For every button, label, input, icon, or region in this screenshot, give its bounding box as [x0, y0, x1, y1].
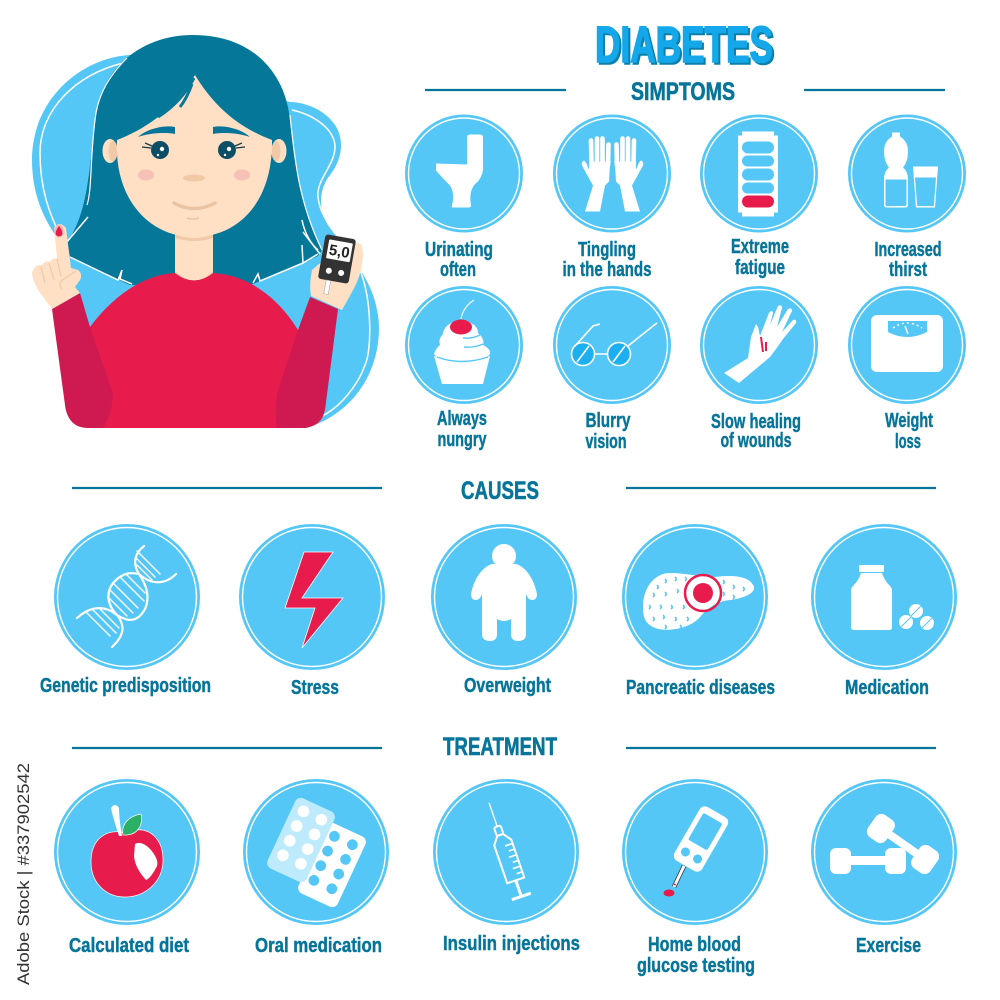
icon: pill bottle	[851, 565, 934, 630]
symptom: slow healing of wounds	[700, 286, 818, 452]
icon: gloves	[582, 138, 643, 212]
label: Extreme	[731, 236, 789, 258]
title	[595, 16, 775, 75]
symptom: extreme fatigue	[700, 114, 818, 279]
right hand	[310, 243, 363, 310]
icon: wounded hand	[724, 305, 796, 383]
left sleeve	[52, 293, 113, 428]
label: nungry	[438, 429, 487, 451]
cause: medication	[811, 524, 957, 699]
cause: genetic predisposition	[40, 524, 211, 697]
symptom: weight loss	[848, 286, 966, 453]
symptom: urinating often	[405, 114, 523, 281]
label: Overweight	[464, 675, 551, 697]
label: fatigue	[735, 257, 785, 279]
right sleeve	[276, 297, 338, 428]
label	[637, 934, 755, 977]
label: Exercise	[856, 935, 921, 957]
label: Slow healing	[711, 411, 801, 433]
label: often	[440, 259, 476, 281]
treatment: insulin injections	[433, 779, 580, 955]
symptom: increased thirst	[848, 114, 966, 281]
label: Pancreatic diseases	[626, 677, 775, 699]
symptom: blurry vision	[553, 286, 671, 453]
label: Insulin injections	[443, 933, 580, 955]
illustration: woman with glucose meter	[32, 35, 379, 428]
label: Tingling	[578, 239, 636, 261]
left hand	[32, 224, 81, 309]
label: Home blood	[648, 934, 741, 956]
icon: pancreas	[643, 573, 754, 630]
label	[586, 410, 631, 453]
label	[711, 411, 801, 452]
treatment: home blood glucose testing	[622, 779, 768, 977]
heading: treatment: TREATMENT	[443, 733, 557, 761]
eyes	[151, 141, 169, 159]
label: Increased	[874, 239, 942, 261]
glucose meter: 5,0	[328, 242, 351, 262]
label: Oral medication	[255, 935, 382, 957]
label	[425, 239, 493, 281]
cheeks, nose, mouth	[138, 170, 154, 180]
label: in the hands	[562, 259, 652, 281]
title: DIABETES	[597, 18, 775, 75]
label	[874, 239, 942, 281]
label	[885, 410, 933, 453]
treatment: calculated diet	[54, 779, 200, 957]
glucose meter	[315, 234, 356, 298]
stock id vertical text: Adobe Stock | #337902542	[14, 763, 33, 985]
label: of wounds	[720, 430, 792, 452]
icon: glucometer	[664, 804, 730, 896]
label: glucose testing	[637, 955, 755, 977]
symptom: tingling in the hands	[553, 114, 671, 281]
label: Always	[437, 408, 487, 430]
icon: bathroom scale	[871, 315, 943, 372]
label: Stress	[291, 677, 339, 699]
treatment: oral medication	[243, 779, 389, 957]
icon: overweight figure	[471, 544, 537, 641]
icon: syringe	[480, 800, 531, 900]
label: Blurry	[586, 410, 631, 432]
label: Medication	[845, 677, 929, 699]
cause: pancreatic diseases	[622, 524, 775, 699]
label	[731, 236, 789, 279]
label: Calculated diet	[69, 935, 189, 957]
heading: causes: CAUSES	[461, 477, 539, 505]
symptom: always hungry	[405, 286, 523, 451]
label: Weight	[885, 410, 933, 432]
cause: stress	[239, 524, 385, 699]
icon: dna	[77, 546, 176, 647]
icon: glasses	[572, 323, 657, 366]
title: DIABETES	[595, 16, 773, 73]
icon: battery	[738, 132, 778, 216]
heading: simptoms: SIMPTOMS	[631, 78, 735, 106]
ears	[102, 139, 286, 163]
icon: apple	[91, 805, 163, 897]
sweater	[65, 273, 325, 428]
label: Genetic predisposition	[40, 675, 211, 697]
neck	[175, 225, 213, 280]
background blob	[32, 55, 379, 428]
hair	[67, 35, 322, 285]
cause: overweight	[431, 524, 577, 697]
eyebrows	[138, 126, 175, 137]
label: vision	[586, 431, 626, 453]
label	[437, 408, 487, 451]
icon: cupcake	[434, 300, 490, 384]
icon: bottle and glass	[884, 132, 938, 208]
label: thirst	[889, 259, 927, 281]
face	[117, 75, 272, 237]
label: Urinating	[425, 239, 493, 261]
fingertip drop	[54, 224, 64, 238]
label: loss	[895, 431, 921, 453]
treatment: exercise	[811, 779, 957, 957]
icon: blister packs	[265, 796, 368, 909]
icon: lightning bolt	[285, 552, 343, 648]
icon: dumbbells	[830, 811, 942, 877]
label	[562, 239, 652, 281]
icon: toilet	[436, 134, 483, 208]
